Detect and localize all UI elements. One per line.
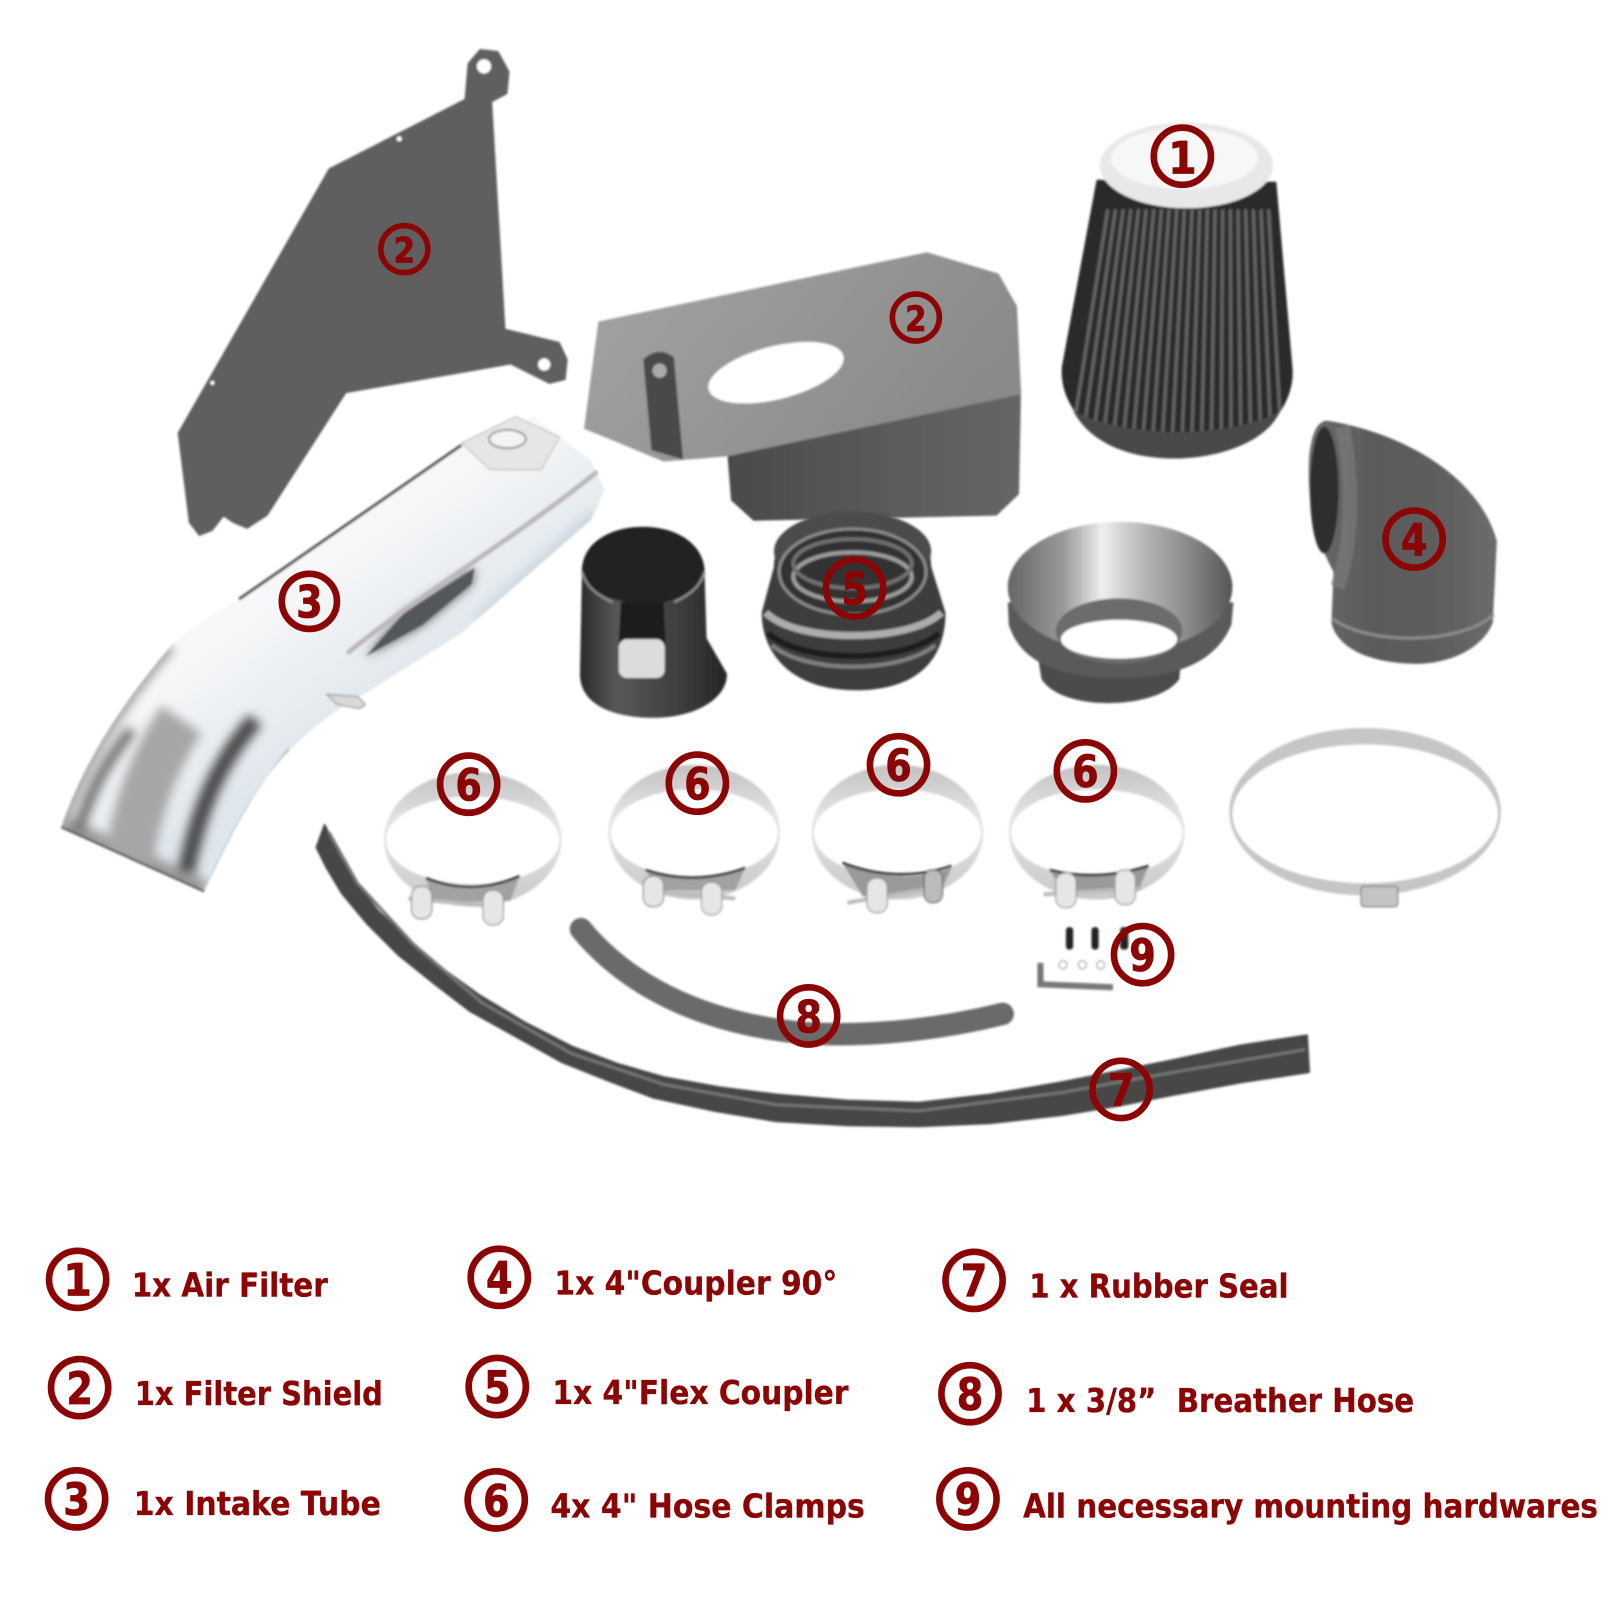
legend item 3: 3 bbox=[63, 1473, 90, 1526]
part: hose clamp 4 bbox=[1009, 765, 1184, 908]
callout: 1 on air filter bbox=[1154, 128, 1211, 185]
part: large band clamp bbox=[1229, 728, 1501, 907]
legend item 1 bbox=[49, 1251, 329, 1308]
legend item 9: 9 bbox=[955, 1473, 981, 1526]
legend item 8: 8 bbox=[957, 1368, 983, 1421]
callout: 8 on breather hose: 8 bbox=[795, 990, 822, 1043]
legend item 4: 4 bbox=[486, 1252, 513, 1305]
part: slotted sleeve bbox=[580, 527, 727, 718]
legend item 7: 1 x Rubber Seal bbox=[1029, 1268, 1289, 1306]
part: 90 degree elbow coupler bbox=[1309, 421, 1497, 664]
callout: 4 on elbow bbox=[1386, 511, 1443, 568]
part: mounting hardware bbox=[1040, 927, 1128, 987]
legend item 9 bbox=[939, 1470, 1598, 1527]
callout: 6 on third clamp: 6 bbox=[885, 739, 912, 792]
part: left filter shield bracket bbox=[178, 49, 568, 536]
callout: 2 on left shield bbox=[381, 226, 428, 273]
legend item 7: 7 bbox=[961, 1255, 987, 1308]
legend item 1: 1 bbox=[63, 1254, 92, 1307]
legend item 5 bbox=[469, 1358, 849, 1415]
legend bbox=[48, 1249, 1598, 1529]
callout: 7 on rubber seal: 7 bbox=[1108, 1064, 1134, 1117]
callout: 4 on elbow: 4 bbox=[1401, 513, 1427, 566]
callout: 9 on hardware: 9 bbox=[1129, 929, 1156, 982]
legend item 4 bbox=[471, 1249, 837, 1306]
part: hose clamp 1 bbox=[384, 772, 562, 925]
callout: 6 on fourth clamp: 6 bbox=[1072, 745, 1099, 798]
callout: 5 on flex coupler bbox=[826, 560, 883, 617]
part: flex coupler bbox=[762, 512, 945, 690]
part: breather hose bbox=[581, 929, 1003, 1034]
callout: 6 on second clamp: 6 bbox=[684, 757, 711, 810]
callout: 6 on third clamp bbox=[870, 736, 927, 793]
part: hose clamp 3 bbox=[812, 765, 983, 913]
legend item 6: 4x 4" Hose Clamps bbox=[550, 1487, 865, 1525]
legend item 8: 1 x 3/8” Breather Hose bbox=[1026, 1382, 1414, 1420]
part: reducer funnel bbox=[1008, 522, 1233, 703]
callout: 3 on tube: 3 bbox=[296, 576, 323, 629]
callout: 2 on left shield: 2 bbox=[394, 231, 415, 271]
callout: 6 on first clamp: 6 bbox=[455, 759, 482, 812]
legend item 5: 5 bbox=[484, 1361, 511, 1414]
callout: 6 on first clamp bbox=[440, 756, 497, 813]
callout: 5 on flex coupler: 5 bbox=[841, 562, 868, 615]
legend item 5: 1x 4"Flex Coupler bbox=[552, 1374, 849, 1412]
part: hose clamp 2 bbox=[609, 765, 780, 915]
part: chrome intake tube bbox=[61, 417, 604, 891]
callout: 7 on rubber seal bbox=[1093, 1061, 1150, 1118]
legend item 2: 2 bbox=[66, 1362, 93, 1415]
callout: 6 on fourth clamp bbox=[1057, 742, 1114, 799]
callout: 1 on air filter: 1 bbox=[1168, 132, 1197, 185]
callout: 8 on breather hose bbox=[780, 987, 837, 1045]
callout: 2 on right shield: 2 bbox=[905, 300, 927, 340]
legend item 3: 1x Intake Tube bbox=[134, 1485, 381, 1523]
callout: 2 on right shield bbox=[892, 294, 939, 341]
part: rubber seal bbox=[317, 825, 1309, 1126]
part: air filter bbox=[1062, 123, 1293, 458]
legend item 2: 1x Filter Shield bbox=[135, 1375, 383, 1413]
part: right filter shield bbox=[584, 252, 1021, 521]
callout: 9 on hardware bbox=[1114, 926, 1171, 983]
legend item 6: 6 bbox=[483, 1474, 510, 1527]
legend item 4: 1x 4"Coupler 90° bbox=[554, 1265, 837, 1303]
legend item 8 bbox=[941, 1365, 1414, 1422]
callout: 3 on tube bbox=[282, 574, 337, 629]
callout: 6 on second clamp bbox=[669, 755, 726, 812]
legend item 7 bbox=[945, 1252, 1289, 1309]
legend item 1: 1x Air Filter bbox=[132, 1267, 329, 1305]
legend item 2 bbox=[51, 1359, 383, 1416]
legend item 3 bbox=[48, 1470, 381, 1527]
legend item 6 bbox=[468, 1471, 865, 1529]
